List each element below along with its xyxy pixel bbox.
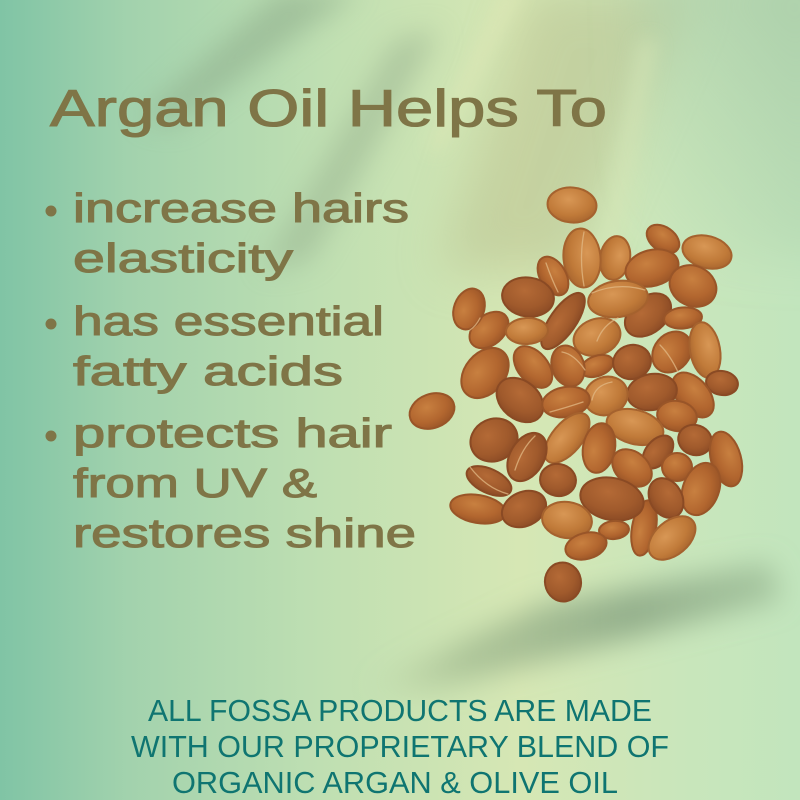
argan nuts cluster bbox=[405, 185, 748, 604]
title: Argan Oil Helps To bbox=[50, 80, 607, 138]
floor shadow bbox=[360, 562, 782, 690]
bullet 3: from UV & bbox=[73, 460, 317, 506]
bullet 3: restores shine bbox=[73, 510, 416, 556]
palm leaf shadows bbox=[140, 0, 800, 690]
bullet 1: increase hairs bbox=[73, 185, 409, 231]
bullet 1 bbox=[46, 185, 409, 281]
bullet 3: protects hair bbox=[73, 410, 392, 456]
footer statement: ORGANIC ARGAN & OLIVE OIL bbox=[172, 765, 618, 800]
footer statement: ALL FOSSA PRODUCTS ARE MADE bbox=[148, 693, 652, 728]
bullet 2: has essential bbox=[73, 298, 384, 344]
bullet 2 bbox=[46, 298, 384, 394]
footer statement: WITH OUR PROPRIETARY BLEND OF bbox=[131, 729, 669, 764]
footer statement bbox=[131, 693, 669, 800]
bullet 1: elasticity bbox=[73, 235, 294, 281]
bullet 3 bbox=[46, 410, 416, 556]
bullet 2: fatty acids bbox=[73, 348, 343, 394]
bullet list bbox=[46, 185, 416, 556]
